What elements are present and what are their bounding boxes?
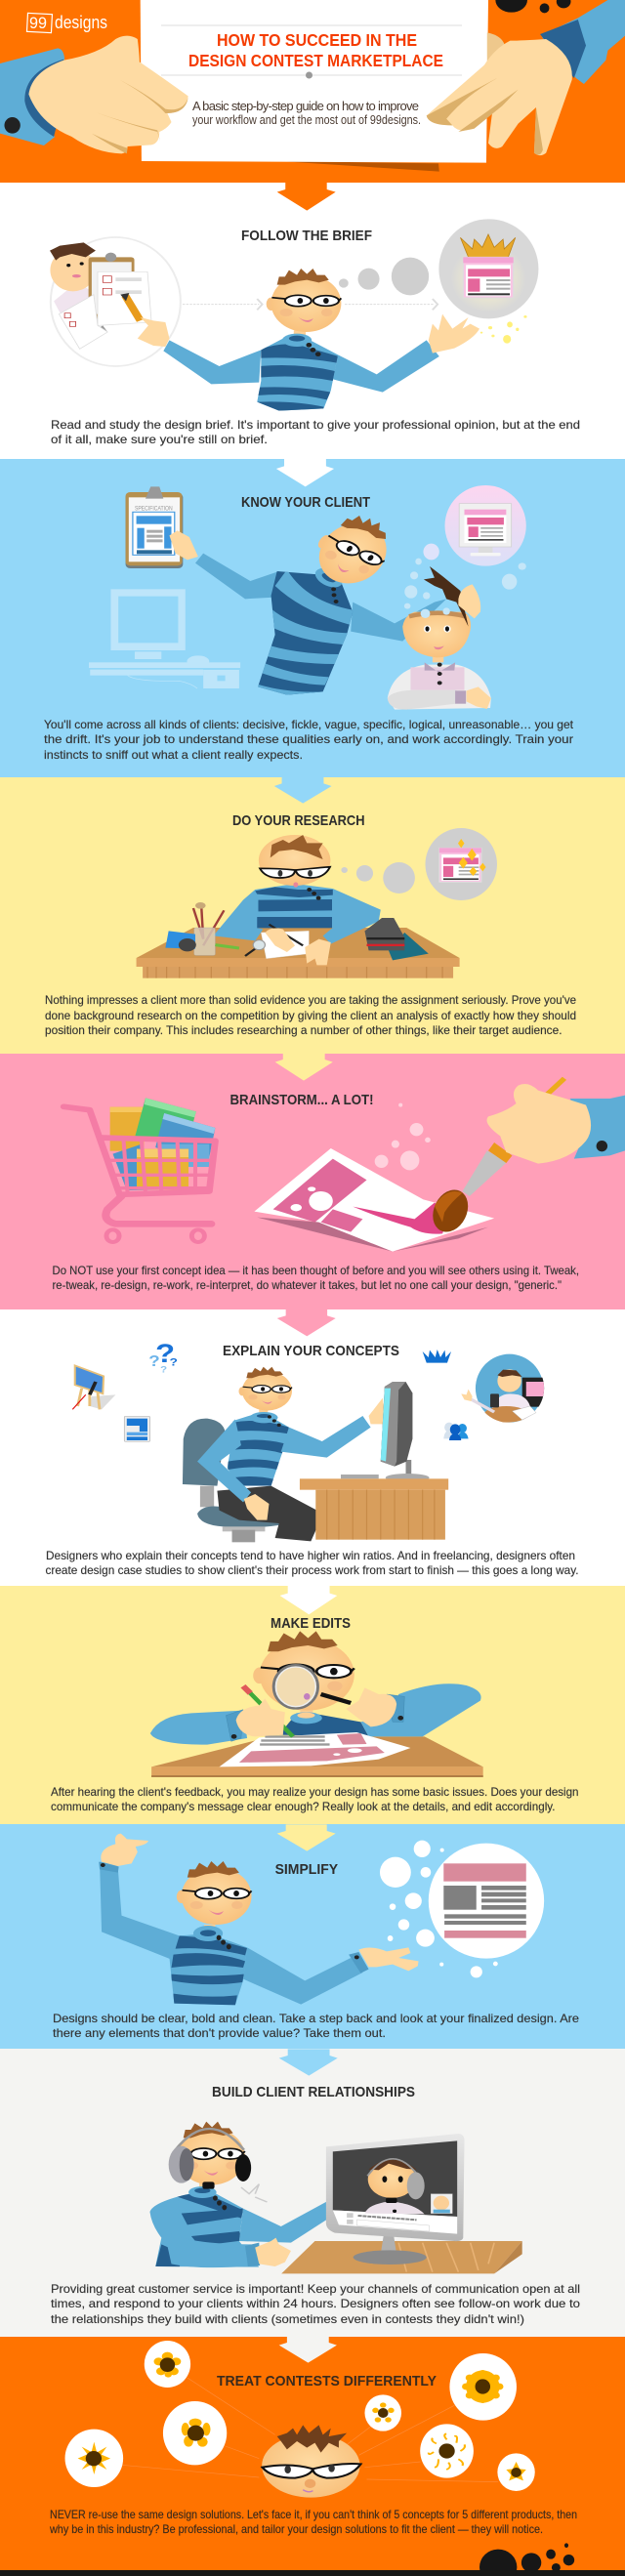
torso (279, 1714, 369, 1736)
panel: explain your concepts (45, 1309, 578, 1577)
subtitle (192, 99, 421, 127)
logo: 99designs (26, 13, 107, 33)
body text: Nothing impresses a client more than solid evidence you are taking the assignment seriously. Prove you've (45, 993, 576, 1007)
desk (300, 1478, 448, 1540)
arm reaching (239, 2200, 329, 2243)
illustration: make edits (150, 1586, 483, 1777)
paper sheet (141, 0, 488, 163)
body text: communicate the company's message clear enough? Really look at the details, and edit accordingly. (51, 1800, 555, 1813)
heading: MAKE EDITS (271, 1615, 351, 1632)
body text (53, 2012, 579, 2040)
illustration: brainstorm (63, 1053, 625, 1252)
right sleeve (542, 0, 625, 84)
blue compass set (165, 931, 196, 951)
body text (45, 1549, 578, 1577)
panel: build client relationships (0, 2049, 625, 2337)
title (188, 30, 443, 70)
shopping cart (63, 1106, 215, 1242)
sound marks (241, 2184, 267, 2202)
flower: far left (65, 2430, 123, 2487)
clipboard (126, 486, 183, 568)
body text: After hearing the client's feedback, you may realize your design has some basic issues. Does your design (51, 1785, 578, 1799)
arrow (279, 2049, 338, 2076)
left sleeve (0, 48, 64, 145)
paper shadow (279, 161, 439, 172)
green pencil (215, 945, 239, 948)
panel: follow the brief (50, 183, 580, 446)
decorative black blobs (495, 0, 570, 13)
body text: instincts to sniff out what a client really expects. (44, 748, 303, 762)
pants (217, 1486, 319, 1541)
panel: brainstorm (0, 1053, 625, 1309)
flower: middle left (163, 2401, 227, 2465)
chair (183, 1419, 293, 1542)
bubbles (375, 1103, 431, 1170)
right hand (427, 39, 572, 155)
collar buttons (307, 888, 321, 900)
arm back (197, 1419, 251, 1502)
body text: You'll come across all kinds of clients: decisive, fickle, vague, specific, logical, unreasonable… you get (44, 718, 574, 731)
arrow (279, 2336, 337, 2363)
footer bar (0, 2570, 625, 2576)
subtitle: A basic step-by-step guide on how to improve (192, 99, 419, 113)
client on screen (364, 2159, 452, 2214)
pencil (243, 1686, 293, 1736)
illustration: designer follows brief (50, 183, 538, 413)
panel background (0, 777, 625, 1054)
flower: star (497, 2453, 535, 2491)
designer: torso (258, 571, 354, 695)
magnifier (245, 940, 265, 956)
thought bubbles (339, 219, 538, 318)
question marks: ? (169, 1356, 178, 1368)
panel background (0, 1586, 625, 1824)
question marks: ? (155, 1340, 175, 1368)
body text: why be in this industry? Be professional, and tailor your design solutions to fit the client — they will notice. (49, 2522, 543, 2536)
connecting lines (121, 2378, 498, 2482)
open hand (358, 1947, 419, 1971)
question marks: ? (160, 1366, 167, 1375)
brush ferrule (462, 1150, 507, 1196)
illustration: client relationships (147, 2049, 522, 2273)
heading: BUILD CLIENT RELATIONSHIPS (212, 2084, 415, 2100)
head (238, 1367, 292, 1411)
body text: Designs should be clear, bold and clean. Take a step back and look at your finalized design. Are (53, 2012, 579, 2025)
jar with brushes (193, 902, 224, 955)
designer: head (267, 269, 341, 332)
panel: simplify (0, 1824, 625, 2049)
body text: of it all, make sure you're still on brief. (51, 433, 268, 446)
arrow (277, 1309, 336, 1336)
head (177, 1861, 252, 1925)
panel background (0, 1309, 625, 1586)
heading: BRAINSTORM... A LOT! (230, 1092, 373, 1108)
clipboard: SPECIFICATION (135, 504, 173, 512)
neck and collar (193, 1925, 231, 1949)
paper shadow (257, 1218, 488, 1252)
designer: arms (195, 554, 446, 642)
illustration: research at desk (137, 777, 497, 978)
flower: swirl (420, 2424, 474, 2478)
left finger shading (92, 80, 188, 153)
browser window with sparkles (439, 839, 486, 882)
panel background (0, 2337, 625, 2570)
heading: TREAT CONTESTS DIFFERENTLY (217, 2373, 437, 2389)
panel background (0, 1054, 625, 1309)
circle: client with brief (50, 237, 181, 366)
hand on knee (244, 1494, 270, 1520)
hand (255, 2238, 291, 2266)
arrow (276, 459, 334, 486)
body text: position their company. This includes researching a number of other things, like their target audience. (45, 1023, 562, 1037)
arms (150, 1683, 481, 1745)
body text: the drift. It's your job to understand these qualities early on, and work accordingly. Train your (44, 732, 573, 746)
crown (460, 234, 516, 257)
writing hands (265, 929, 331, 965)
arrow (277, 183, 336, 211)
body text (51, 2282, 580, 2326)
designer: body and arms (213, 884, 381, 944)
panel background (0, 2049, 625, 2337)
hand on monitor (369, 1398, 386, 1424)
right finger shading (427, 76, 543, 155)
cuffs (226, 1694, 404, 1741)
arrow (275, 1053, 333, 1081)
designer: buttons (306, 343, 321, 356)
left cuff band (24, 60, 63, 137)
hand (486, 1084, 591, 1164)
right cuff band (540, 20, 586, 78)
neck and collar (250, 1408, 281, 1427)
monitor stand (354, 2236, 427, 2264)
question marks: ? (148, 1352, 160, 1370)
client: body (388, 662, 491, 710)
desk (137, 928, 460, 978)
panel: know your client (0, 459, 625, 777)
flower: center right (364, 2394, 401, 2431)
arm front (281, 1416, 371, 1458)
pale computer (89, 589, 240, 688)
body text: done background research on the competition by giving the client an analysis of exactly how they should (45, 1009, 576, 1022)
title: HOW TO SUCCEED IN THE (217, 30, 417, 50)
paper (219, 1732, 410, 1766)
thought bubbles (341, 828, 497, 900)
designer: arms (163, 340, 439, 393)
left hand (28, 36, 188, 153)
paper on desk (261, 931, 309, 959)
illustration: know your client (89, 459, 526, 710)
headset (169, 2129, 251, 2189)
heading: FOLLOW THE BRIEF (241, 228, 372, 244)
body text (51, 1785, 578, 1813)
cuff button (597, 1141, 607, 1151)
pointing hand (101, 1834, 148, 1866)
client: head (402, 610, 471, 662)
thought oval with monitor (445, 485, 526, 566)
panel: make edits (0, 1586, 625, 1824)
paint stroke (353, 1203, 450, 1234)
panel background (0, 183, 625, 459)
brush handle (546, 1078, 564, 1096)
body text: Read and study the design brief. It's important to give your professional opinion, but at the end (51, 418, 580, 432)
designer: head (259, 835, 330, 888)
panel: header (0, 0, 625, 183)
people icon (443, 1423, 469, 1440)
designer: torso (257, 338, 338, 411)
subtitle: your workflow and get the most out of 99designs. (192, 112, 421, 127)
left cuff button (4, 117, 21, 134)
head (253, 1631, 354, 1711)
dashed arrow right (345, 299, 438, 310)
head (173, 2122, 245, 2185)
question marks (148, 1340, 178, 1375)
body text (49, 2508, 577, 2536)
forearm (163, 2228, 259, 2267)
sparkles (480, 315, 527, 344)
blue crown (423, 1350, 451, 1363)
panel background (0, 1824, 625, 2049)
panel background (0, 459, 625, 777)
body text (45, 993, 576, 1037)
header background (0, 0, 625, 183)
cuff (245, 2243, 260, 2266)
title: DESIGN CONTEST MARKETPLACE (188, 51, 443, 70)
body text (51, 418, 580, 446)
oval vignette with client (461, 1354, 546, 1423)
arrow (274, 777, 332, 804)
keyboard (341, 1475, 379, 1478)
logo: 99designs: 99 (29, 14, 47, 32)
bubbles (380, 1841, 498, 1977)
body text: there any elements that don't provide value? Take them out. (53, 2026, 386, 2040)
documents in cart (110, 1098, 215, 1190)
torso (170, 1934, 247, 2006)
designer: head (303, 506, 403, 593)
client: lifted hair and hand (424, 566, 480, 627)
body text: the relationships they build with clients (sometimes even in contests they didn't win!) (51, 2312, 524, 2326)
torso (227, 1415, 289, 1486)
panel: do your research (0, 777, 625, 1054)
brush head (428, 1186, 474, 1235)
designer torso (150, 2193, 260, 2267)
desk (281, 2241, 522, 2273)
cuffs (99, 1862, 369, 1974)
books (364, 918, 429, 960)
illustration: treat contests differently (65, 2336, 574, 2576)
body text: re-tweak, re-design, re-work, re-interpret, do whatever it takes, but let no one call your design, "generic." (53, 1278, 562, 1292)
illustration: hands holding paper (0, 0, 625, 172)
body text: Designers who explain their concepts tend to have higher win ratios. And in freelancing, designers often (46, 1549, 575, 1562)
flower: top left (145, 2341, 190, 2388)
monitor (381, 1382, 430, 1482)
collar and buttons (188, 2181, 227, 2210)
title rule lines (161, 25, 462, 78)
hand holding clipboard (169, 530, 198, 560)
dashed arrow left (183, 299, 263, 310)
decorative black blobs (479, 2543, 574, 2576)
left hand (138, 317, 169, 347)
browser window (463, 257, 514, 298)
designer head (262, 2425, 360, 2498)
body text (53, 1264, 579, 1292)
magnifying glass (273, 1665, 351, 1708)
body text: times, and respond to your clients within 24 hours. Designers often see follow-on work due to (51, 2297, 580, 2310)
body text: Do NOT use your first concept idea — it has been thought of before and you will see others using it. Tweak, (53, 1264, 579, 1277)
arrow (277, 1824, 336, 1851)
heading: EXPLAIN YOUR CONCEPTS (223, 1343, 399, 1359)
desk (151, 1736, 483, 1777)
simplified layout oval (429, 1844, 544, 1959)
finger behind paper (487, 32, 506, 65)
body text: create design case studies to show client's their process work from start to finish — this goes a long way. (45, 1563, 578, 1577)
collar (290, 1707, 322, 1724)
panel: treat contests differently (0, 2336, 625, 2576)
paper sheet (254, 1148, 494, 1252)
designer: neck and collar (282, 330, 312, 347)
heading: DO YOUR RESEARCH (232, 812, 365, 829)
illustration: explain concepts (72, 1309, 546, 1542)
body text: Providing great customer service is important! Keep your channels of communication open at all (51, 2282, 580, 2296)
right hand (429, 314, 479, 353)
layout card icon (124, 1416, 149, 1441)
monitor (326, 2134, 465, 2241)
flower: top right (449, 2353, 517, 2421)
hands (236, 1687, 396, 1736)
body text (44, 718, 574, 762)
pen (270, 925, 303, 945)
illustration: simplify (99, 1824, 544, 2007)
arms (100, 1862, 362, 2005)
heading: SIMPLIFY (275, 1861, 338, 1878)
scalp bubbles (404, 544, 526, 618)
logo: 99designs: designs (55, 13, 107, 32)
easel icon (72, 1365, 115, 1409)
sleeve (570, 1096, 625, 1159)
designer: collar and buttons (311, 564, 347, 603)
arrow (280, 1586, 337, 1614)
paper design blocks (273, 1159, 367, 1232)
heading: KNOW YOUR CLIENT (241, 494, 370, 511)
